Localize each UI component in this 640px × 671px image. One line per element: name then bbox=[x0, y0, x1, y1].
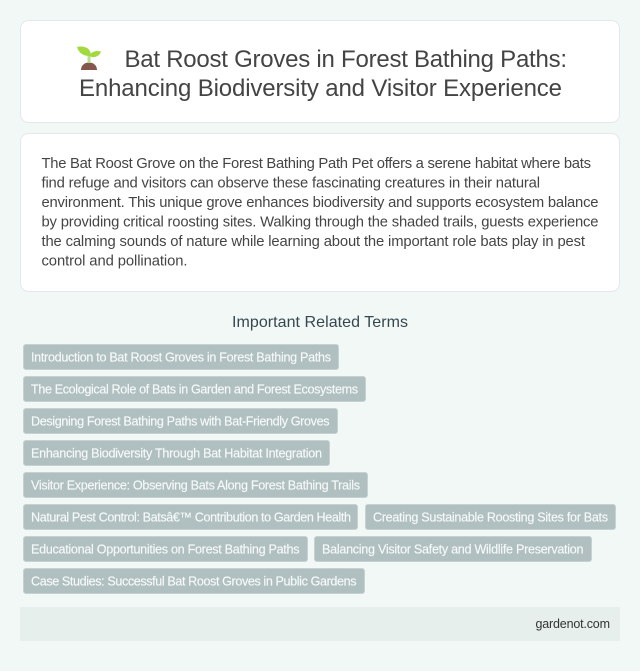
tag: visitor experience: Visitor Experience: Observing Bats Along Forest Bathing Trails bbox=[31, 478, 360, 492]
description text block: The Bat Roost Grove on the Forest Bathing Path Pet offers a serene habitat where bats bbox=[42, 156, 591, 172]
footer bar bbox=[20, 607, 620, 641]
tag: enhancing biodiversity: Enhancing Biodiversity Through Bat Habitat Integration bbox=[31, 446, 322, 460]
description text block: control and pollination. bbox=[42, 254, 188, 270]
tag: designing paths: Designing Forest Bathing Paths with Bat-Friendly Groves bbox=[31, 414, 330, 428]
tag: educational opportunities bbox=[24, 536, 308, 562]
tag: case studies bbox=[24, 568, 364, 594]
tag: introduction bbox=[24, 344, 338, 370]
title card background bbox=[20, 20, 620, 122]
tag: visitor experience bbox=[24, 472, 368, 498]
panel: title card bbox=[20, 20, 620, 122]
description card background bbox=[20, 134, 620, 292]
panel: description card bbox=[20, 134, 620, 292]
icon: seedling bbox=[77, 47, 101, 70]
title line 1: Bat Roost Groves in Forest Bathing Paths: bbox=[124, 46, 567, 73]
tag: visitor safety: Balancing Visitor Safety and Wildlife Preservation bbox=[322, 542, 584, 556]
description text block: environment. This unique grove enhances biodiversity and supports ecosystem balance bbox=[42, 195, 598, 211]
description text block: find refuge and visitors can observe these fascinating creatures in their natural bbox=[42, 176, 540, 192]
tag: ecological role: The Ecological Role of Bats in Garden and Forest Ecosystems bbox=[31, 382, 358, 396]
heading: important related terms: Important Related Terms bbox=[232, 314, 408, 331]
panel: related term tags bbox=[24, 344, 616, 594]
tag: ecological role bbox=[24, 376, 366, 402]
tag: visitor safety bbox=[314, 536, 592, 562]
title line 2: Enhancing Biodiversity and Visitor Experience bbox=[79, 75, 562, 102]
tag: educational opportunities: Educational Opportunities on Forest Bathing Paths bbox=[31, 542, 300, 556]
tag: designing paths bbox=[24, 408, 338, 434]
description text block: the calming sounds of nature while learning about the important role bats play in pest bbox=[42, 234, 585, 250]
tag: sustainable roosting: Creating Sustainable Roosting Sites for Bats bbox=[373, 510, 608, 524]
tag: case studies: Case Studies: Successful Bat Roost Groves in Public Gardens bbox=[31, 574, 356, 588]
tag: sustainable roosting bbox=[366, 504, 616, 530]
footer bbox=[20, 607, 620, 641]
footer site name: gardenot.com bbox=[536, 617, 610, 631]
tag: enhancing biodiversity bbox=[24, 440, 330, 466]
description text block bbox=[42, 156, 598, 270]
tag: natural pest control: Natural Pest Control: Batsâ€™ Contribution to Garden Health bbox=[31, 510, 351, 524]
tag: introduction: Introduction to Bat Roost Groves in Forest Bathing Paths bbox=[31, 350, 331, 364]
tag: natural pest control bbox=[24, 504, 358, 530]
description text block: by providing critical roosting sites. Walking through the shaded trails, guests experience bbox=[42, 214, 598, 230]
